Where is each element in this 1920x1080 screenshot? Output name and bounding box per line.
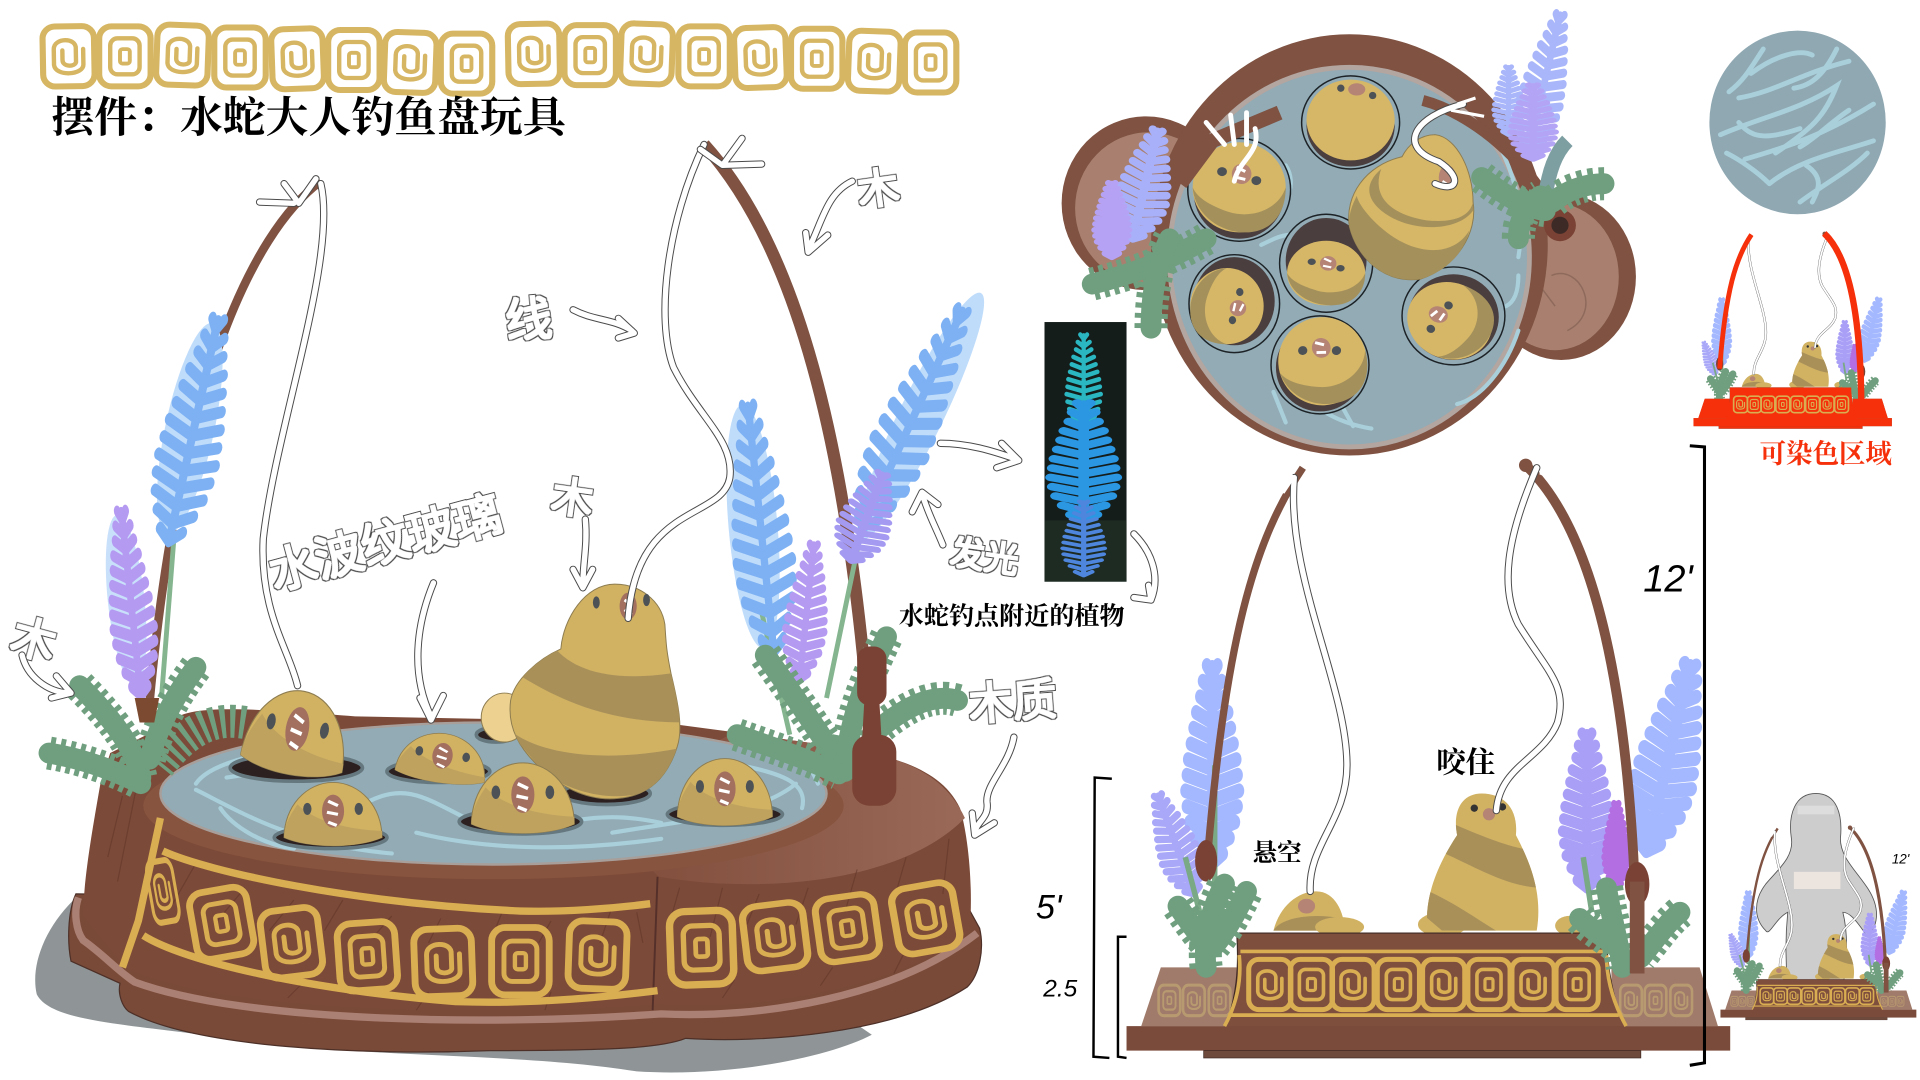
left fern (49, 667, 245, 784)
front base (1127, 933, 1730, 1058)
rods top view (1180, 100, 1576, 241)
human silhouette (1757, 793, 1877, 986)
water surface (160, 722, 827, 864)
label: biting: 咬住 (1436, 747, 1495, 780)
annotation: glowing (912, 492, 1022, 583)
front side steps (1141, 967, 1718, 1026)
small background mole (481, 693, 528, 742)
front ferns (1178, 882, 1680, 973)
annotation: wood, center (548, 462, 598, 588)
outer lobes (1062, 116, 1231, 290)
caption: plant: 水蛇钓点附近的植物 (899, 601, 1125, 630)
annotation: wood material (966, 663, 1059, 835)
label: dyeable area: 可染色区域 (1760, 439, 1892, 469)
front view model (1127, 459, 1730, 1058)
gold spirals on base (145, 859, 962, 997)
lines top view (1206, 98, 1484, 187)
dimension bracket 2.5 (1042, 937, 1127, 1058)
dimension bracket 2.5: 2.5 (1042, 976, 1078, 1003)
dyeable-area view (1693, 232, 1892, 429)
label: hanging: 悬空 (1253, 839, 1302, 867)
front small moles (1273, 891, 1584, 937)
reference plant photo (1044, 322, 1127, 582)
right fishing line (628, 138, 762, 618)
wells and moles (1188, 76, 1505, 415)
right rod handle over fern (852, 647, 896, 806)
annotation: water-ripple glass: 水波纹玻璃 (260, 475, 509, 604)
wood grain (108, 784, 949, 1010)
left lavender (99, 313, 247, 698)
annotation: wood, lower left: 木 (5, 600, 64, 673)
big mole top view (1349, 135, 1474, 280)
decorative gold spiral border (42, 23, 956, 94)
left fishing rod (149, 181, 321, 704)
main disc (1151, 34, 1548, 456)
small moles (239, 682, 355, 783)
annotation: wood, upper right (806, 152, 902, 252)
main perspective model (35, 138, 1001, 1072)
mole holes (230, 727, 782, 849)
front spirals (1249, 959, 1598, 1010)
base top surface (588, 732, 965, 884)
annotation: wood, upper right: 木 (853, 152, 902, 218)
miniature model (1720, 826, 1916, 1020)
annotation: water-ripple glass (260, 475, 509, 720)
gold band lines (122, 818, 658, 1002)
right fern (737, 637, 958, 774)
dimension line 12 feet: 12' (1643, 558, 1694, 600)
front big mole (1420, 793, 1543, 933)
left fishing line (260, 179, 324, 686)
mini dimension: 12' (1892, 851, 1910, 866)
scale figure with miniature (1720, 793, 1916, 1020)
right lavender (718, 283, 1001, 735)
big striped mole (502, 584, 686, 799)
annotation: glowing: 发光 (948, 524, 1022, 583)
ground shadow (35, 857, 872, 1072)
front plants back (1140, 658, 1719, 937)
annotation: wood material: 木质 (966, 663, 1059, 733)
annotation: wood, center: 木 (548, 462, 598, 527)
dimension line 12 feet (1643, 446, 1704, 1065)
base body (83, 709, 971, 1010)
dimension bracket 5 feet: 5' (1036, 888, 1063, 926)
arrow to plant photo (940, 443, 1019, 468)
water (1169, 67, 1529, 447)
annotation: line: 线 (502, 281, 555, 352)
annotation: wood, lower left (5, 600, 71, 698)
annotation: line (502, 281, 634, 352)
arrow to caption (1134, 534, 1155, 600)
right fishing rod (704, 144, 872, 759)
red overlay (1693, 233, 1892, 429)
ferns top view (1092, 178, 1604, 328)
lavender top view (1095, 10, 1580, 257)
front rods (1195, 459, 1649, 980)
title: 摆件：水蛇大人钓鱼盘玩具 (51, 94, 571, 142)
miniature model (1693, 232, 1892, 429)
top view (1062, 10, 1636, 456)
dimension bracket 5 feet (1036, 778, 1112, 1058)
front lines (1269, 468, 1570, 891)
water texture swatch (1709, 31, 1886, 214)
base flange (69, 894, 981, 1052)
